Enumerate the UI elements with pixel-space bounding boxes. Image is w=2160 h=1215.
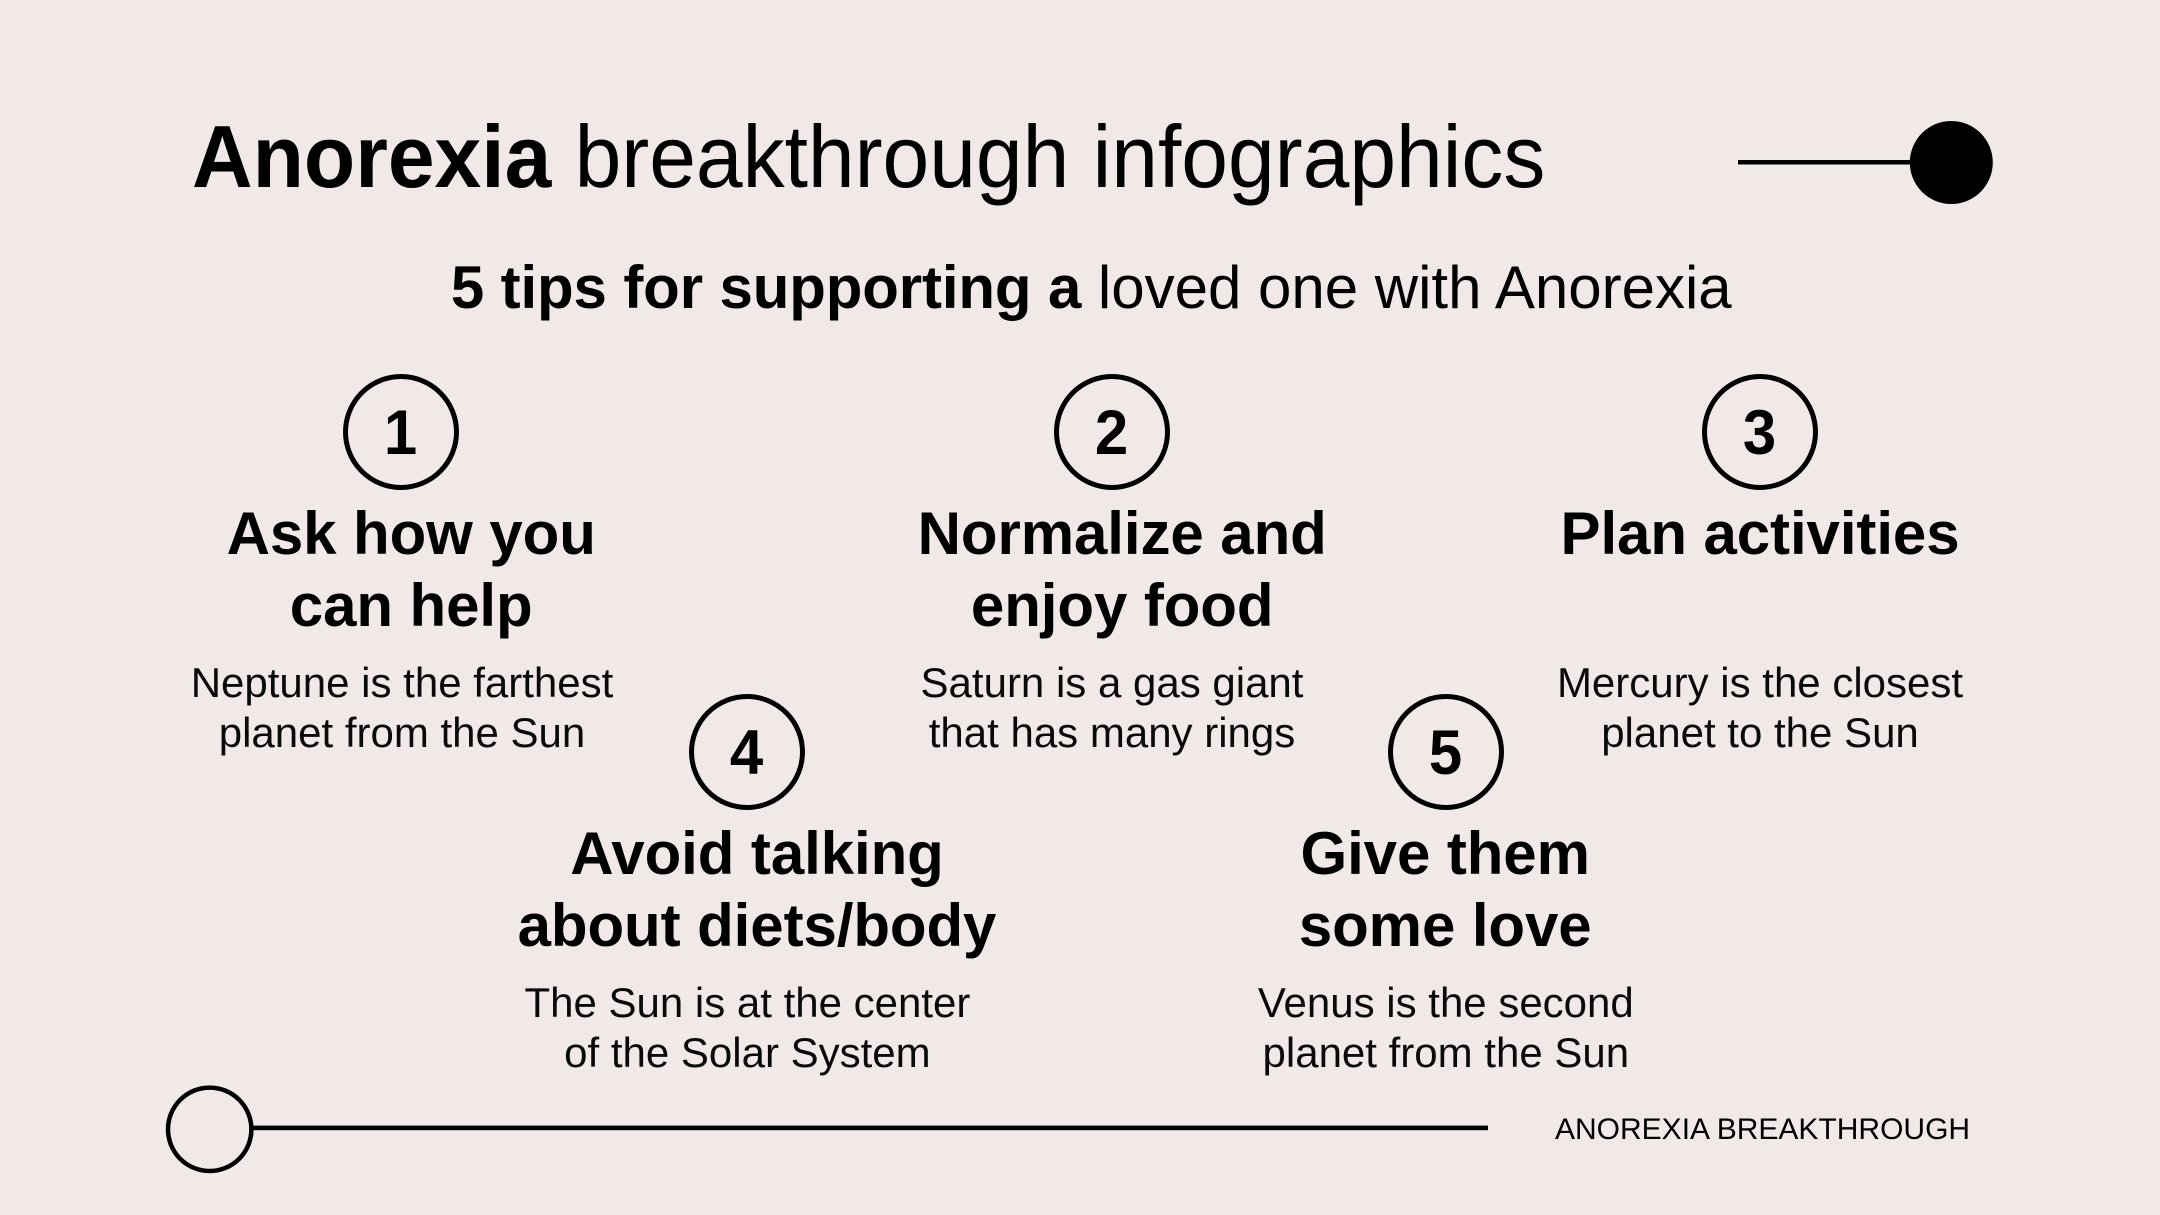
number badge 4	[689, 694, 805, 810]
description 1	[191, 659, 613, 756]
description 3: Mercury is the closest	[1557, 659, 1963, 706]
tip 5	[1258, 694, 1634, 1076]
number badge 5	[1388, 694, 1504, 810]
heading 2	[918, 500, 1327, 639]
heading 4	[518, 820, 996, 959]
number badge 3	[1702, 374, 1818, 490]
tip 3	[1557, 374, 1963, 756]
heading 2: Normalize and	[918, 500, 1327, 567]
heading 4: about diets/body	[518, 892, 996, 959]
description 5	[1258, 978, 1634, 1076]
description 1: Neptune is the farthest	[191, 659, 613, 706]
description 2: Saturn is a gas giant	[921, 659, 1303, 706]
description 3	[1557, 659, 1963, 756]
heading 1	[227, 500, 596, 639]
description 5: Venus is the second	[1258, 978, 1634, 1026]
description 4	[524, 978, 970, 1076]
subtitle: 5 tips for supporting a loved one with Anorexia	[451, 254, 1732, 321]
heading 5	[1299, 820, 1592, 959]
description 4: of the Solar System	[564, 1029, 931, 1076]
heading 3: Plan activities	[1560, 500, 1960, 567]
number badge 1	[343, 374, 459, 490]
tip 4	[518, 694, 996, 1076]
heading 2: enjoy food	[971, 572, 1273, 639]
heading 5: Give them	[1300, 820, 1590, 887]
number badge 3: 3	[1743, 398, 1777, 468]
description 1: planet from the Sun	[219, 709, 585, 756]
tip 2	[918, 374, 1327, 756]
number badge 2: 2	[1095, 398, 1129, 468]
description 2: that has many rings	[929, 709, 1295, 756]
number badge 2	[1054, 374, 1170, 490]
number badge 5: 5	[1429, 718, 1463, 788]
heading 5: some love	[1299, 892, 1592, 959]
heading 1: can help	[290, 572, 533, 639]
decoration: line with filled circle	[1738, 121, 1993, 204]
tip 1	[191, 374, 613, 756]
decoration: outlined circle with line	[166, 1085, 1488, 1174]
number badge 1: 1	[384, 398, 418, 468]
description 2	[921, 659, 1304, 756]
title: Anorexia breakthrough infographics	[192, 107, 1545, 206]
heading 1: Ask how you	[227, 500, 596, 567]
description 3: planet to the Sun	[1601, 709, 1919, 756]
footer label: ANOREXIA BREAKTHROUGH	[1555, 1113, 1970, 1146]
number badge 4: 4	[730, 718, 764, 788]
description 5: planet from the Sun	[1263, 1029, 1629, 1076]
heading 4: Avoid talking	[570, 820, 944, 887]
description 4: The Sun is at the center	[524, 978, 970, 1026]
